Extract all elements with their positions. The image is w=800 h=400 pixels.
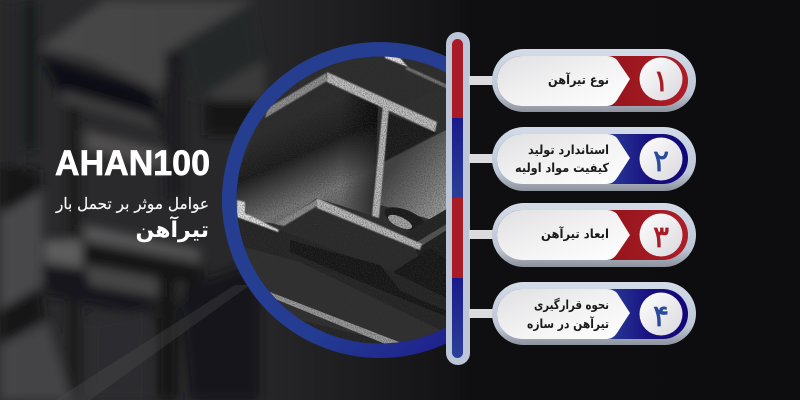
number disc <box>640 58 682 100</box>
subtitle: عوامل موثر بر تحمل بار <box>55 195 209 213</box>
label: تیرآهن در سازه <box>527 316 609 331</box>
pill frame <box>492 127 696 191</box>
label <box>515 142 610 175</box>
label plate <box>497 56 630 106</box>
label plate <box>497 134 630 184</box>
number: ۱ <box>653 64 669 99</box>
label plate <box>497 289 630 339</box>
pill frame <box>492 282 696 345</box>
photo <box>236 56 446 344</box>
label plate <box>497 210 630 260</box>
beam bright flange edges <box>237 55 450 250</box>
subject heading: تیرآهن <box>135 215 209 243</box>
step 4 <box>469 282 696 345</box>
number: ۲ <box>653 144 669 179</box>
step 2 <box>469 127 696 191</box>
number: ۳ <box>653 220 669 255</box>
circular photo of I-beam <box>222 42 446 358</box>
connector <box>469 230 499 239</box>
number disc <box>640 138 682 180</box>
pill frame <box>492 203 696 267</box>
label: ابعاد تیرآهن <box>541 226 609 241</box>
bar segments <box>452 39 463 358</box>
connector <box>469 76 499 85</box>
coloured band <box>497 289 688 339</box>
label: نوع تیرآهن <box>548 72 609 87</box>
pill frame <box>492 49 696 112</box>
label: نحوه قرارگیری <box>534 297 609 312</box>
photo grain <box>236 56 446 344</box>
title <box>55 144 210 243</box>
label: استاندارد تولید <box>528 142 609 157</box>
coloured band <box>497 134 688 184</box>
number: ۴ <box>653 299 669 334</box>
coloured band <box>497 210 688 260</box>
label <box>527 297 609 331</box>
logo wordmark: AHAN100 <box>55 144 210 183</box>
number disc <box>640 214 682 256</box>
number disc <box>640 292 682 336</box>
step 3 <box>469 203 696 267</box>
step 1 <box>469 49 696 112</box>
connector <box>469 154 499 163</box>
connector <box>469 309 499 318</box>
vertical progress bar <box>446 32 470 365</box>
bar frame <box>446 32 470 365</box>
coloured band <box>497 56 688 106</box>
label: کیفیت مواد اولیه <box>515 160 610 175</box>
ring <box>222 42 446 358</box>
